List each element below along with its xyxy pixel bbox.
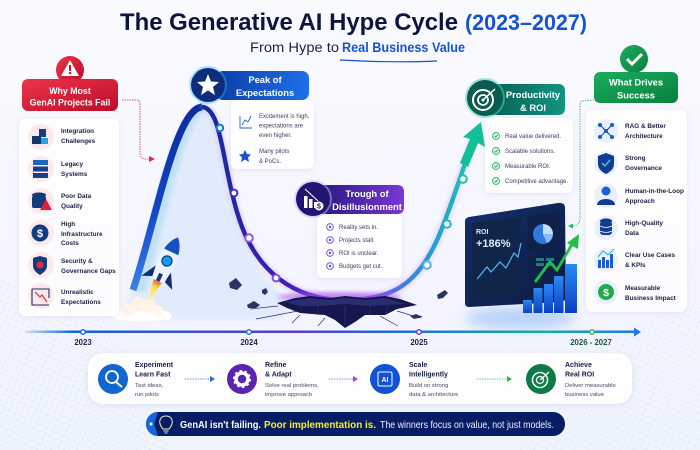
timeline: 2026 - 2027 xyxy=(570,338,612,347)
stage: experiment: Test ideas, xyxy=(135,383,164,389)
stage: scale: Intelligently xyxy=(409,372,448,378)
subtitle: Real Business Value xyxy=(342,40,465,55)
stage: experiment: Learn Fast xyxy=(135,372,171,378)
icon: target xyxy=(465,78,505,118)
card xyxy=(317,214,402,278)
heading: Productivity xyxy=(506,89,561,100)
item: impact: Business Impact xyxy=(625,295,677,302)
timeline: 2024 xyxy=(240,338,258,347)
item: unrealistic: Expectations xyxy=(61,299,101,306)
stage: refine xyxy=(227,362,319,398)
callout banner xyxy=(146,412,565,436)
item: impact: Measurable xyxy=(625,285,661,292)
icon: check xyxy=(620,45,648,73)
card: Projects stall. xyxy=(339,238,375,244)
card: Real value delivered. xyxy=(505,134,561,140)
item: unrealistic: Unrealistic xyxy=(61,289,94,296)
timeline: 2023 xyxy=(74,338,92,347)
arrow xyxy=(329,376,358,382)
card: even higher. xyxy=(259,133,292,139)
hype cycle curve xyxy=(128,107,485,320)
heading: Why Most xyxy=(49,86,91,96)
stage: experiment: run pilots xyxy=(135,392,159,398)
item: human in the loop: Human-in-the-Loop xyxy=(625,188,684,195)
item: integration: Challenges xyxy=(61,138,96,145)
item: rag: RAG & Better xyxy=(625,123,666,130)
item: human in the loop xyxy=(594,184,684,208)
item: rag xyxy=(594,119,666,143)
stage: refine: Refine xyxy=(265,362,286,369)
stage: refine: improve approach xyxy=(265,392,312,398)
stage: scale: AI xyxy=(382,377,389,384)
item: infrastructure costs xyxy=(28,220,103,247)
callout text: GenAI isn't failing. xyxy=(180,420,261,431)
subtitle: From Hype to xyxy=(250,40,339,55)
card: Reality sets in. xyxy=(339,225,378,231)
card: & PoCs. xyxy=(259,159,281,165)
heading xyxy=(594,72,678,103)
card: Measurable ROI. xyxy=(505,164,551,170)
heading: Disillusionment xyxy=(332,201,402,212)
item: poor data: Quality xyxy=(61,203,83,210)
panel: trough of disillusionment xyxy=(294,180,404,278)
panel: peak of expectations xyxy=(189,66,314,169)
item: human in the loop: Approach xyxy=(625,198,655,205)
heading: Expectations xyxy=(236,87,294,98)
stage: refine: Solve real problems, xyxy=(265,383,319,389)
arrow xyxy=(185,376,215,382)
item: integration xyxy=(28,124,96,150)
item: infrastructure costs: High xyxy=(61,221,75,228)
item: security: Security & xyxy=(61,258,93,265)
heading: What Drives xyxy=(609,76,663,88)
roi label: ROI xyxy=(476,229,488,236)
timeline: 2025 xyxy=(410,338,428,347)
card: Many pilots xyxy=(259,149,289,155)
heading xyxy=(216,71,309,100)
arrow xyxy=(477,376,512,382)
item: security: Governance Gaps xyxy=(61,268,116,275)
subtitle xyxy=(250,40,465,62)
stage: achieve xyxy=(526,362,616,398)
card: Budgets get cut. xyxy=(339,264,383,270)
item: rag: Architecture xyxy=(625,133,663,140)
icon: warning xyxy=(56,56,84,84)
title: (2023–2027) xyxy=(465,10,587,35)
growth arrow xyxy=(535,234,579,282)
heading: Trough of xyxy=(345,188,389,199)
card: Competitive advantage. xyxy=(505,179,568,185)
callout text: Poor implementation is. xyxy=(264,420,376,431)
stage: refine: & Adapt xyxy=(265,372,292,378)
callout text xyxy=(180,420,554,431)
card: Excitement is high, xyxy=(259,114,310,120)
item: data: High-Quality xyxy=(625,220,663,227)
stage: achieve: Real ROI xyxy=(565,372,594,378)
item: impact xyxy=(594,280,677,304)
card xyxy=(485,118,573,193)
heading xyxy=(490,84,565,115)
rocket xyxy=(133,230,193,307)
item: data xyxy=(594,216,663,240)
stage: scale xyxy=(370,362,459,398)
card: expectations are xyxy=(259,124,304,130)
icon: light bulb xyxy=(160,416,172,433)
item: poor data xyxy=(28,188,92,214)
item: poor data: Poor Data xyxy=(61,193,92,200)
item: infrastructure costs: Infrastructure xyxy=(61,231,103,238)
item: infrastructure costs: $ xyxy=(37,228,43,240)
heading xyxy=(320,185,404,214)
bar chart xyxy=(523,264,577,313)
item: legacy xyxy=(28,156,88,182)
item: legacy: Legacy xyxy=(61,161,83,168)
heading: GenAI Projects Fail xyxy=(30,98,110,108)
item: impact: $ xyxy=(603,287,609,299)
heading: Peak of xyxy=(248,74,283,85)
item: use cases: & KPIs xyxy=(625,262,646,269)
item: unrealistic xyxy=(28,283,101,309)
panel: what drives success xyxy=(586,45,687,312)
item: integration: Integration xyxy=(61,128,94,135)
item: legacy: Systems xyxy=(61,171,88,178)
stage: achieve: business value xyxy=(565,392,605,398)
roi dashboard xyxy=(465,203,579,329)
card: ROI is unclear. xyxy=(339,251,379,257)
stage: achieve: Deliver measurable xyxy=(565,383,616,389)
item: governance: Strong xyxy=(625,155,646,162)
heading xyxy=(22,79,118,111)
item: infrastructure costs: Costs xyxy=(61,240,79,247)
arrow head: productivity xyxy=(460,122,485,167)
heading: & ROI xyxy=(520,102,546,113)
card: Scalable solutions. xyxy=(505,149,555,155)
smoke cloud xyxy=(113,296,172,322)
stage: experiment xyxy=(98,362,174,398)
stage: achieve: Achieve xyxy=(565,362,592,369)
callout text: The winners focus on value, not just models. xyxy=(380,420,554,431)
line chart xyxy=(477,243,521,279)
icon: falling chart: $ xyxy=(317,204,321,210)
stage: scale: Build on strong xyxy=(409,383,448,389)
roi label: +186% xyxy=(476,238,511,250)
arrow: success to dashboard xyxy=(568,100,594,228)
icon: star xyxy=(189,66,227,104)
panel: productivity and roi xyxy=(465,78,573,193)
heading: Success xyxy=(617,90,655,100)
title: The Generative AI Hype Cycle xyxy=(120,9,458,36)
timeline xyxy=(25,328,641,347)
item: use cases: Clear Use Cases xyxy=(625,252,676,259)
stage: scale: Scale xyxy=(409,362,427,369)
arrow: failure to peak xyxy=(122,100,155,162)
curve markers xyxy=(217,125,467,281)
roi label xyxy=(476,229,511,250)
card xyxy=(231,100,314,169)
panel: stages xyxy=(88,353,632,404)
item: governance: Governance xyxy=(625,165,662,172)
item: security xyxy=(28,252,116,278)
panel: why most genai projects fail xyxy=(19,56,119,316)
item: data: Data xyxy=(625,230,639,237)
item: governance xyxy=(594,151,662,175)
pie chart xyxy=(533,224,553,244)
trough crater xyxy=(229,278,448,328)
item: use cases xyxy=(594,248,676,272)
stage: scale: data & architecture xyxy=(409,392,459,398)
stage: experiment: Experiment xyxy=(135,362,174,369)
